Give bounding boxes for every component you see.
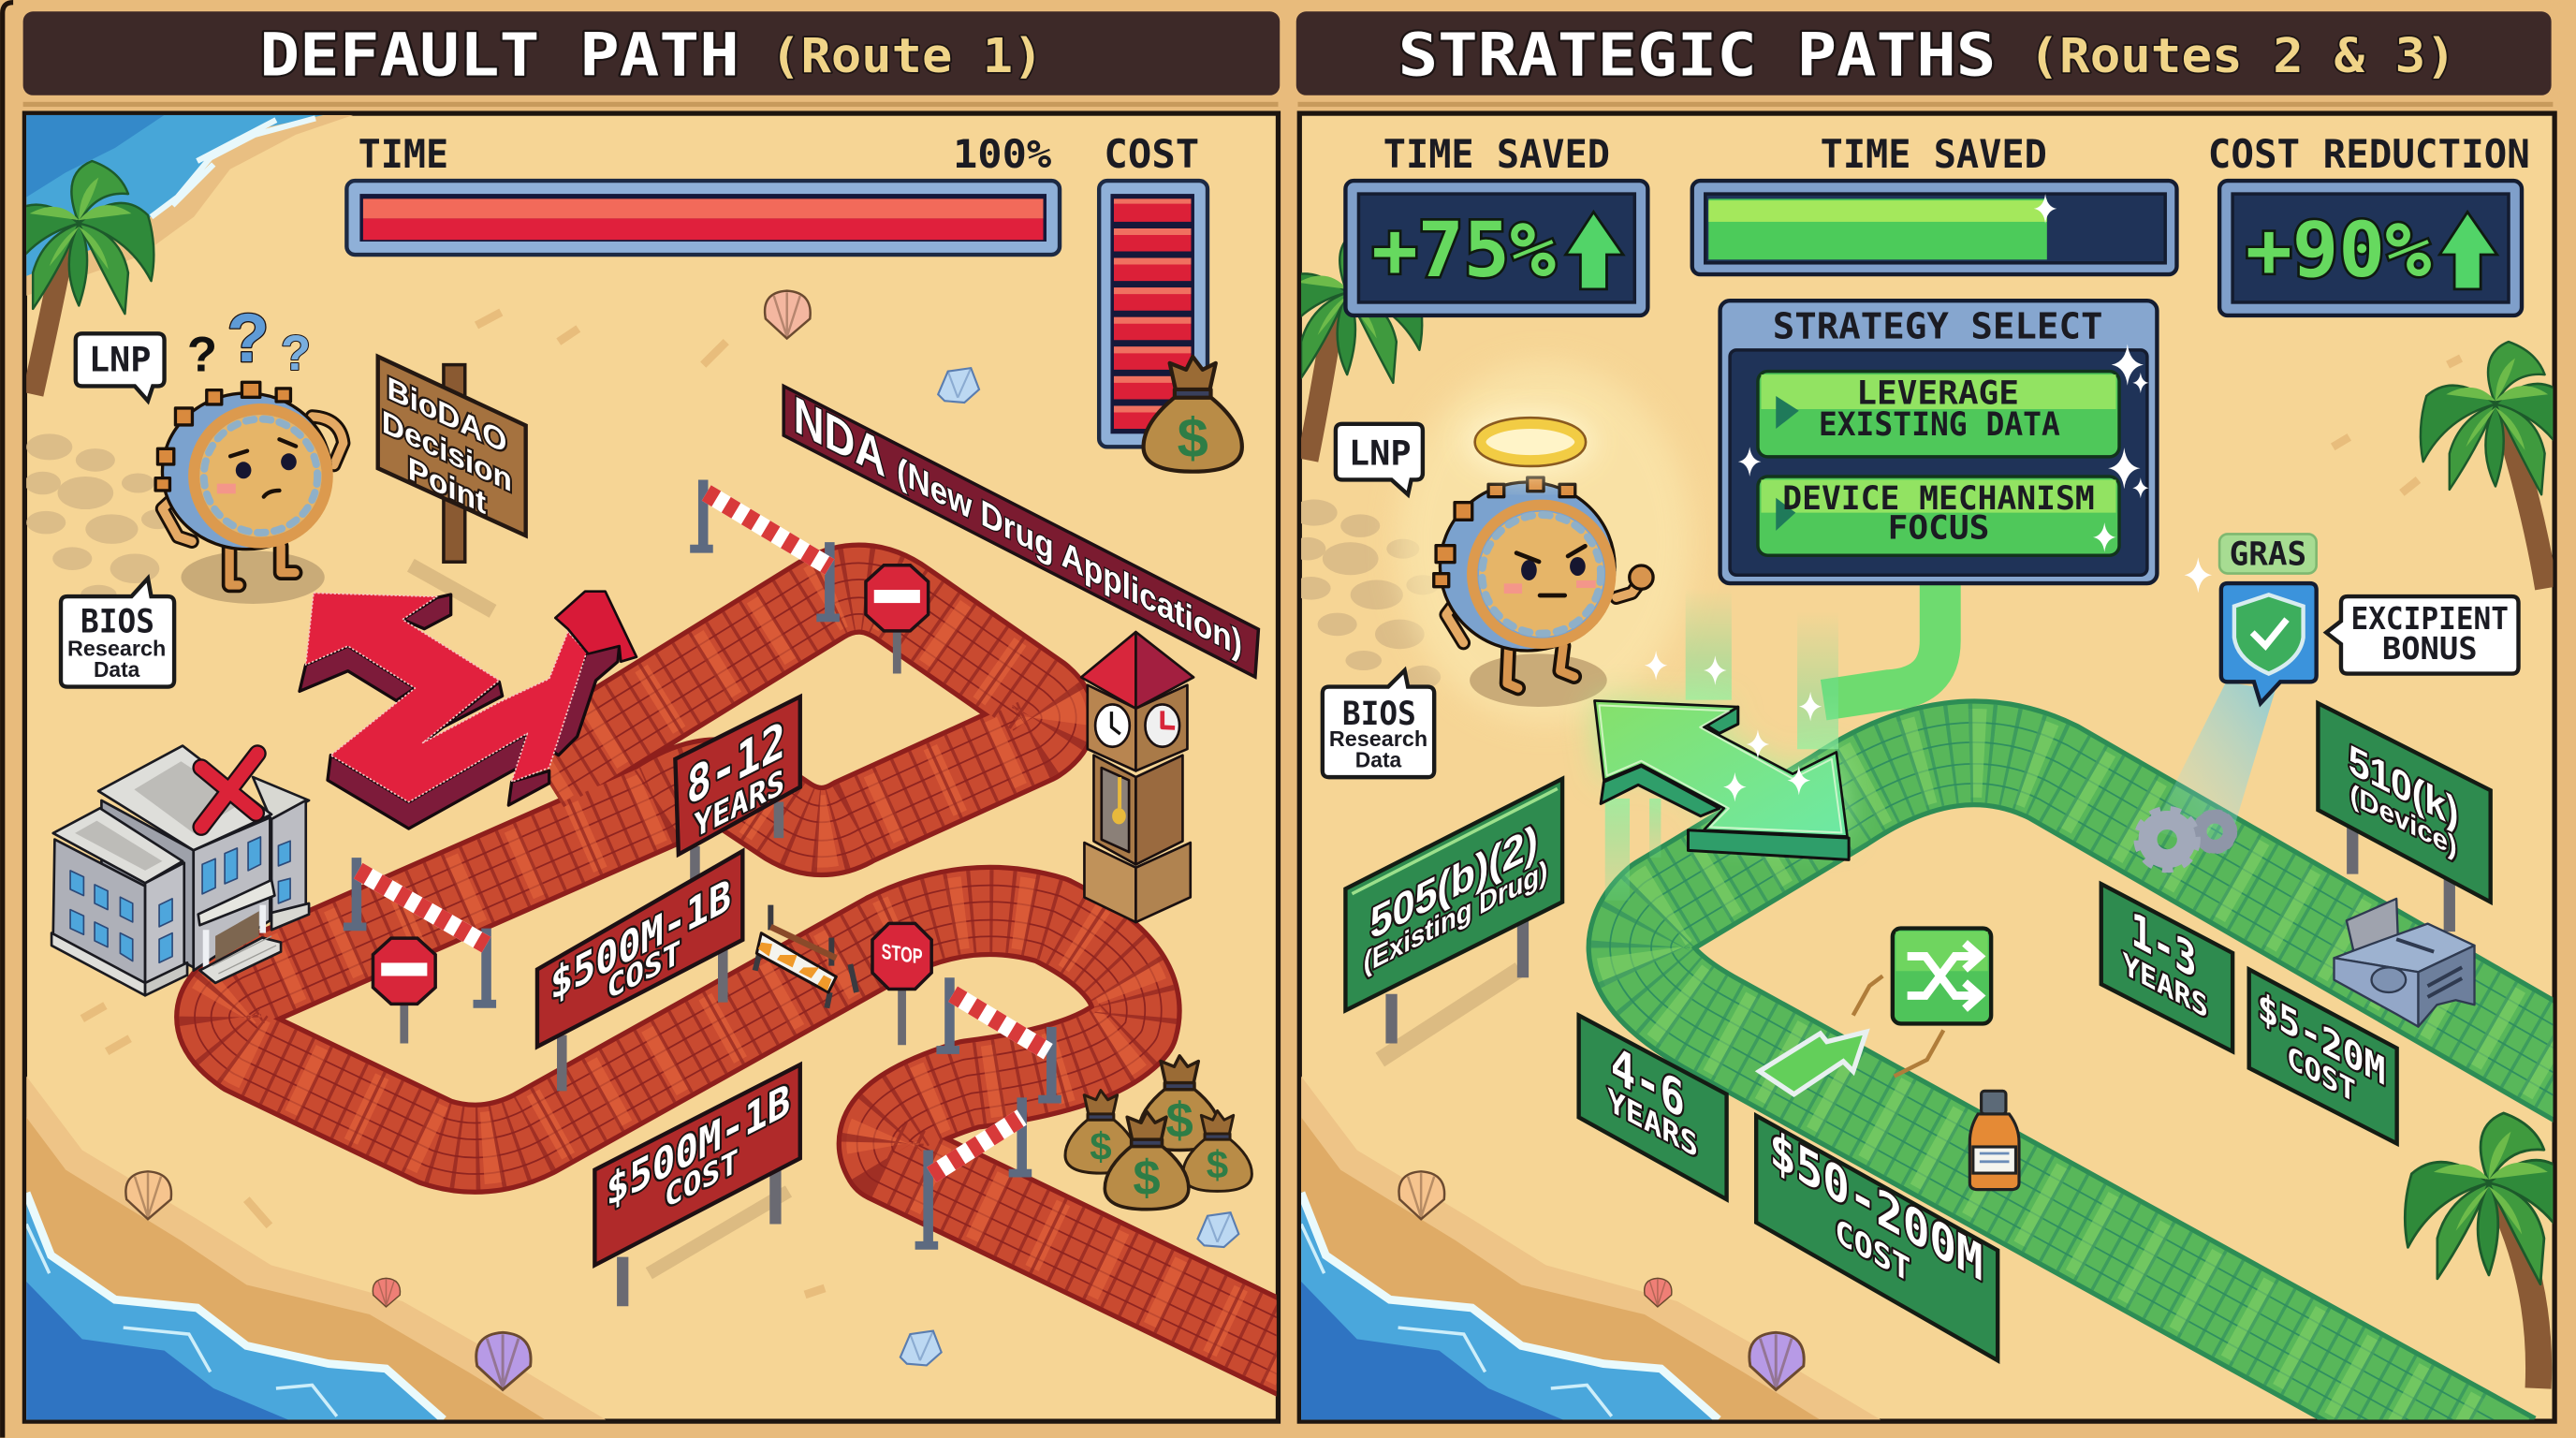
connector: strategy to arrow [1823,583,1940,700]
sign: 510(k) device: (Device) [2350,777,2457,863]
question marks [187,299,311,383]
callout: BIOS research data: BIOS [80,603,154,641]
sign: 8-12 years [675,697,800,879]
sign: 1-3 years: 1-3 [2130,902,2197,990]
decorative shells top [765,291,979,403]
decorative route arrows [1853,976,1943,1077]
sign: 500M-1B cost upper: COST [607,934,681,1007]
heading: routes 2 and 3: (Routes 2 & 3) [2029,29,2456,84]
gauge: time bar full [346,181,1060,255]
tag: GRAS: GRAS [2230,536,2306,574]
callout: BIOS research data: Research [67,636,166,660]
callout: LNP: LNP [1349,433,1412,474]
stat box: +75% [1345,181,1647,315]
shells right [1399,1171,1804,1389]
sign: 505(b)(2) existing drug: (Existing Drug) [1364,854,1547,980]
sign: 505(b)(2) existing drug [1345,779,1562,1060]
hud label: time: TIME [359,131,448,177]
sign: 8-12 years: 8-12 [687,711,785,818]
sign: BioDAO decision point [378,357,526,611]
button: device mechanism focus: DEVICE MECHANISM [1782,479,2095,518]
sign: 510(k) device: 510(k) [2349,735,2458,837]
sign: 8-12 years: YEARS [695,761,784,846]
sign: 5-20M cost [2249,969,2397,1143]
arrow: red forked arrow [300,592,637,829]
barricade: orange [755,905,856,1008]
question marks: ? [281,326,311,381]
sign: 5-20M cost: $5-20M [2257,983,2385,1095]
sign: 1-3 years: YEARS [2123,946,2208,1025]
hud label: time saved left: TIME SAVED [1383,131,1610,177]
arrow: green glowing forked arrow [1594,700,1849,859]
icon: money bag [1144,357,1242,472]
building: crossed-out institution [51,746,309,995]
sparkle near GRAS [2185,557,2212,593]
sand marks [82,312,825,1295]
sign: 1-3 years [2101,884,2232,1051]
icon: money bag: $ [1178,406,1208,469]
callout: excipient bonus [2326,596,2519,674]
icon: red X [201,754,257,827]
icon: palm tree bottom right [2404,1112,2554,1389]
road: green brick route [1641,753,2572,1438]
icon: shuffle [1893,929,1991,1023]
light glow around hero [1397,361,1692,723]
light beams [1605,588,1838,901]
callout: excipient bonus: EXCIPIENT [2351,600,2509,637]
sign: 500M-1B cost lower: COST [665,1142,739,1216]
sign: 500M-1B cost lower: $500M-1B [607,1075,790,1217]
icon: medicine bottle [1969,1091,2019,1190]
sign: 50-200M cost: COST [1835,1211,1910,1291]
money bags cluster [1065,1056,1251,1210]
sign: 505(b)(2) existing drug: 505(b)(2) [1370,814,1538,949]
icon: palm tree left [26,159,155,397]
panel: default path [24,113,1314,1423]
clock tower [1081,632,1193,922]
banner: NDA [783,386,1258,677]
money bags cluster: $ [1207,1142,1228,1186]
sign: 50-200M cost: $50-200M [1769,1119,1983,1294]
heading: strategic paths: STRATEGIC PATHS [1398,21,1996,90]
sign: 4-6 years [1579,1016,1727,1199]
shells bottom left [125,1171,1238,1389]
icon: gears [2137,810,2235,870]
hud label: cost: COST [1104,131,1199,177]
panel: strategic paths [1272,113,2573,1438]
sign: 4-6 years: 4-6 [1611,1034,1685,1131]
panel: strategy select: STRATEGY SELECT [1773,306,2102,348]
pebbles [26,434,165,594]
sand marks [2331,354,2463,496]
button: leverage existing data [1758,372,2119,457]
barriers [344,479,1061,1245]
callout: BIOS research data: Data [94,657,140,682]
progress bar: time saved [1692,181,2176,274]
sign: stop [872,923,931,1045]
sign: no entry lower [373,938,435,1043]
callout: BIOS research data: Research [1329,726,1427,751]
stat box: +90%: +90% [2246,207,2432,295]
stat box: +75%: +75% [1372,207,1556,295]
money bags cluster: $ [1090,1124,1112,1168]
callout: excipient bonus: BONUS [2382,630,2478,667]
sign: no entry upper [866,565,929,674]
callout: BIOS research data [1323,670,1434,777]
beach: top left water [26,115,353,296]
button: device mechanism focus: FOCUS [1888,509,1989,548]
icon: small route arrow [1760,1032,1866,1094]
sign: 500M-1B cost upper [537,851,742,1091]
gauge: cost bar full [1099,181,1208,447]
stat box: +90% [2219,181,2522,315]
banner: NDA: (New Drug Application) [897,448,1242,665]
character: confused LNP [155,382,344,604]
sign: BioDAO decision point: BioDAO [388,370,506,461]
question marks: ? [227,299,270,376]
callout: LNP [1336,424,1423,494]
character: confident LNP [1434,477,1653,707]
header: strategic paths [1296,11,2552,95]
banner: NDA: NDA [794,386,886,489]
sign: 5-20M cost: COST [2287,1039,2356,1109]
money bags cluster: $ [1133,1151,1161,1206]
hud label: 100 percent: 100% [953,131,1052,177]
beach: bottom left water [1301,1077,1886,1423]
road: red brick route [220,589,1314,1364]
button: device mechanism focus [1758,477,2119,555]
icon: GRAS shield badge [2221,583,2317,703]
callout: LNP [76,333,165,401]
icon: palm tree top right [2421,342,2570,588]
sign: BioDAO decision point: Point [408,450,486,521]
callout: BIOS research data [61,579,174,687]
icon: device machine [2334,899,2475,1027]
heading: route 1: (Route 1) [770,29,1044,84]
sign: 500M-1B cost lower [594,1064,800,1306]
beach: bottom left water [26,1077,611,1423]
header: default path [23,11,1280,95]
panel: strategy select [1720,301,2157,583]
callout: LNP: LNP [89,340,152,380]
sign: BioDAO decision point: Decision [382,404,512,499]
button: leverage existing data: EXISTING DATA [1819,405,2060,444]
sparkles on arrow [1645,651,1822,801]
sign: 510(k) device [2318,703,2491,932]
question marks: ? [187,328,217,383]
callout: BIOS research data: Data [1355,748,1402,772]
callout: BIOS research data: BIOS [1342,695,1416,733]
icon: halo [1464,409,1595,475]
icon: palm tree left [1301,242,1423,462]
pebbles [1301,500,1442,686]
sign: 500M-1B cost upper: $500M-1B [550,870,731,1011]
money bags cluster: $ [1166,1093,1193,1148]
hud label: time saved middle: TIME SAVED [1821,131,2047,177]
button: leverage existing data: LEVERAGE [1856,374,2019,413]
sign: 4-6 years: YEARS [1607,1081,1698,1166]
heading: default path: DEFAULT PATH [259,21,739,90]
sign: stop: STOP [882,939,923,969]
hud label: cost reduction: COST REDUCTION [2208,131,2530,177]
beam from GRAS badge [2152,682,2276,855]
